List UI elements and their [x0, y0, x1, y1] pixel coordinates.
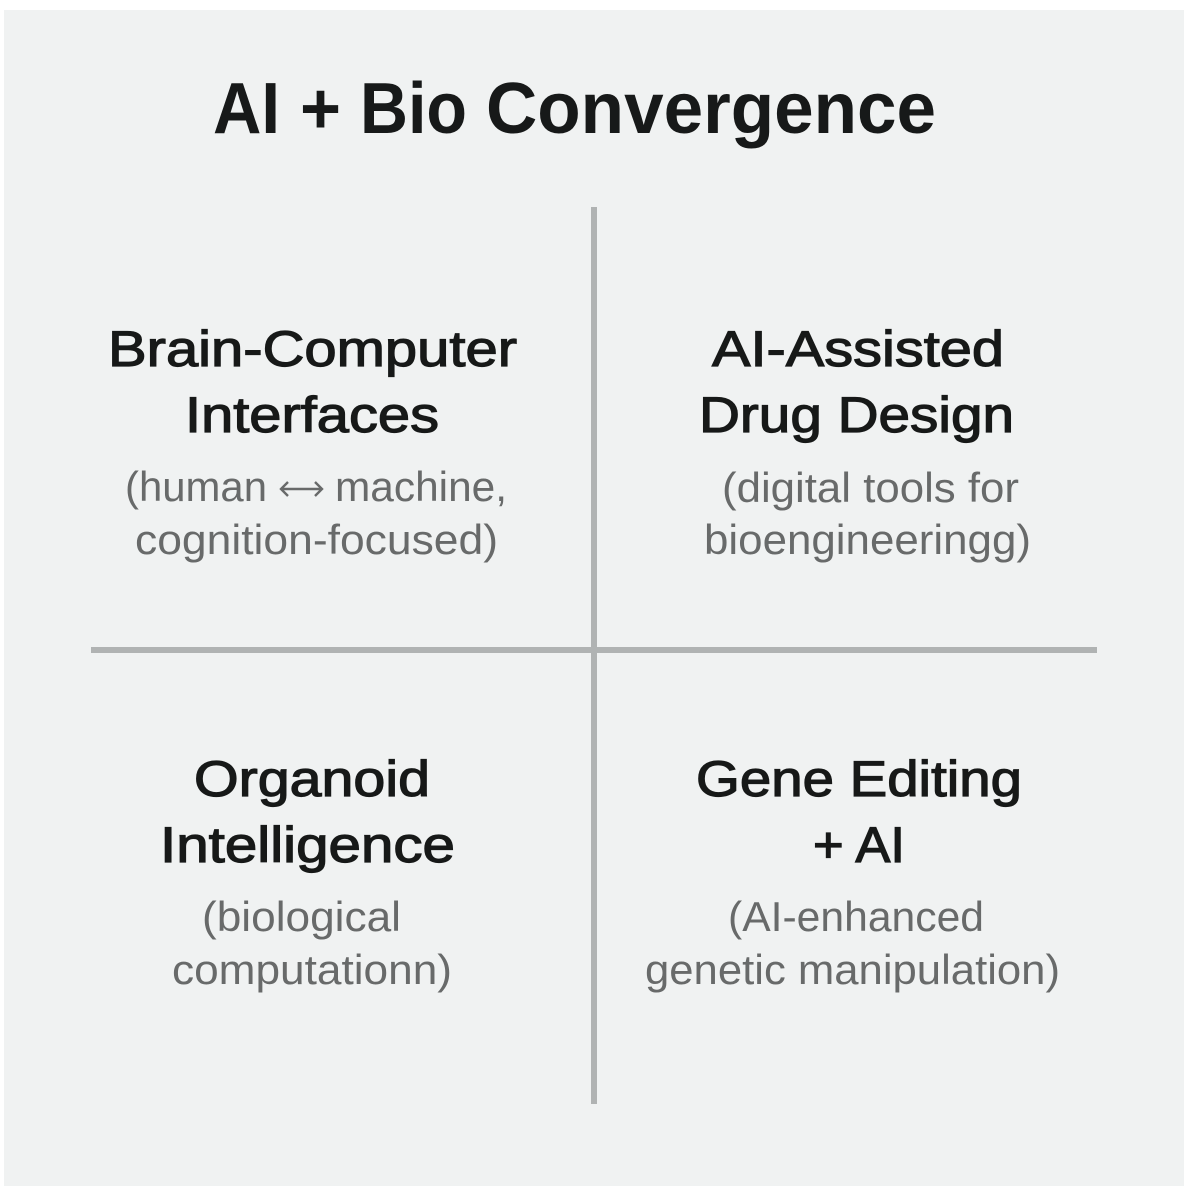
- heading: brain-computer interfaces: Interfaces: [185, 387, 439, 443]
- description: gene editing + ai: (AI-enhanced: [728, 893, 984, 940]
- description: organoid intelligence: computationn): [172, 946, 452, 993]
- panel: brain-computer interfaces: [108, 321, 517, 563]
- title: Convergence: [486, 69, 936, 149]
- title: Bio: [360, 69, 467, 149]
- heading: gene editing + ai: [696, 751, 1022, 873]
- panel: organoid intelligence: [160, 751, 455, 993]
- title: AI: [213, 69, 280, 149]
- panel: ai-assisted drug design: [699, 321, 1031, 563]
- panel: gene editing + ai: [645, 751, 1060, 993]
- description: brain-computer interfaces: cognition-focused): [135, 516, 498, 563]
- heading: brain-computer interfaces: [108, 321, 517, 443]
- description: ai-assisted drug design: bioengineeringg): [704, 516, 1031, 563]
- heading: organoid intelligence: Intelligence: [160, 817, 455, 873]
- heading: ai-assisted drug design: AI-Assisted: [712, 321, 1004, 377]
- description: organoid intelligence: (biological: [202, 893, 401, 940]
- horizontal divider: [91, 647, 1097, 653]
- heading: organoid intelligence: [160, 751, 455, 873]
- heading: gene editing + ai: Gene Editing: [696, 751, 1022, 807]
- title: +: [300, 69, 341, 149]
- heading: organoid intelligence: Organoid: [194, 751, 430, 807]
- description: ai-assisted drug design: [704, 464, 1031, 563]
- icon: two-way arrow: [281, 482, 322, 496]
- heading: brain-computer interfaces: Brain-Computer: [108, 321, 517, 377]
- vertical divider: [591, 207, 597, 1104]
- title: [213, 69, 936, 149]
- heading: gene editing + ai: + AI: [813, 817, 905, 873]
- description: brain-computer interfaces: (human: [125, 463, 267, 510]
- description: gene editing + ai: genetic manipulation): [645, 946, 1060, 993]
- description: gene editing + ai: [645, 893, 1060, 993]
- description: ai-assisted drug design: (digital tools for: [722, 464, 1019, 511]
- heading: ai-assisted drug design: [699, 321, 1014, 443]
- description: organoid intelligence: [172, 893, 452, 993]
- heading: ai-assisted drug design: Drug Design: [699, 387, 1014, 443]
- description: brain-computer interfaces: machine,: [335, 463, 507, 510]
- description: brain-computer interfaces: [125, 463, 507, 563]
